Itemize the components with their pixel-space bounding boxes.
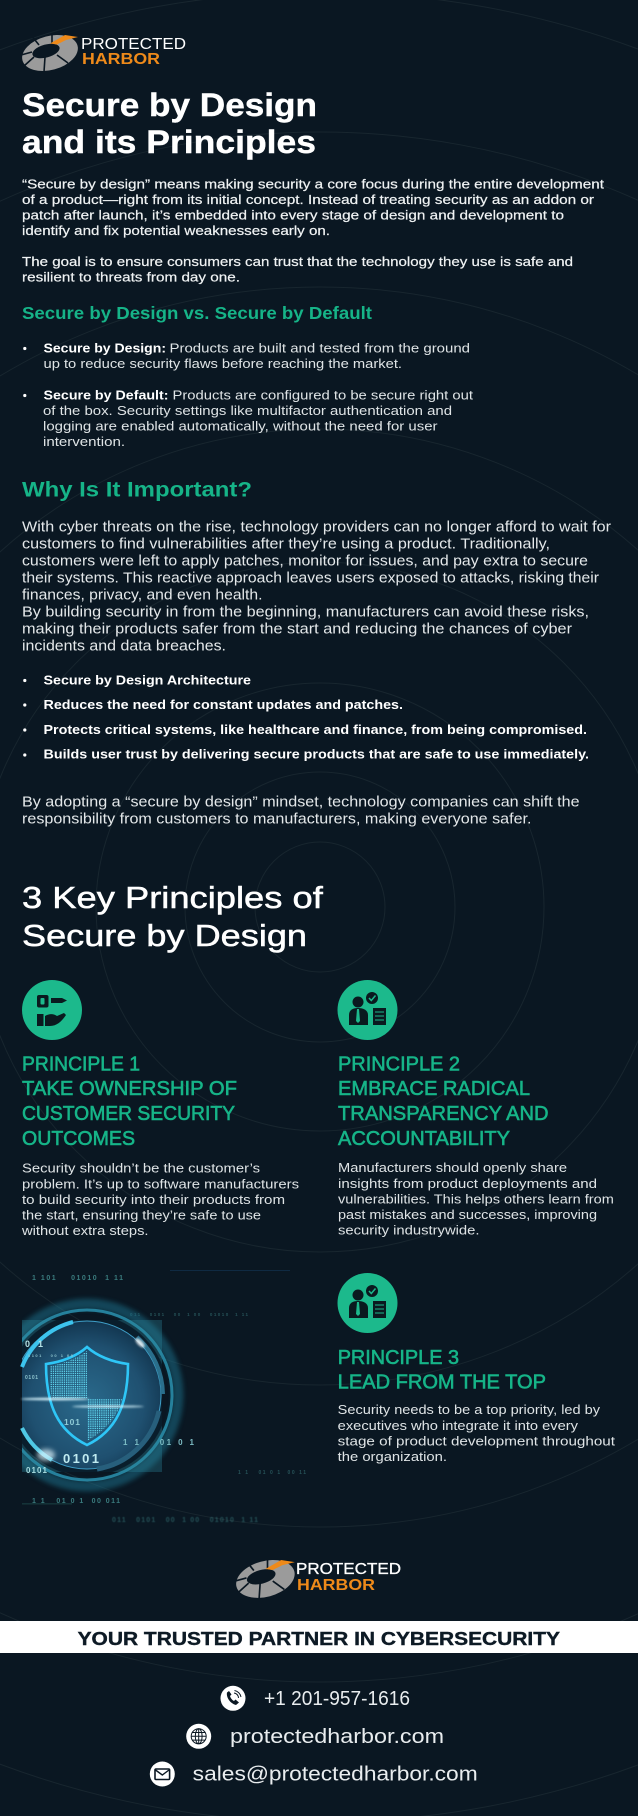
contact: phone: +1 201-957-1616 (264, 1688, 410, 1710)
heading: OUTCOMES (22, 1128, 135, 1150)
bullet: secure by default: Products are configured to be secure right out (172, 387, 473, 402)
bullet: secure by design: Products are built and tested from the ground (170, 340, 470, 355)
text block: intro: identify and fix potential weaknesses early on. (22, 223, 330, 238)
contact: email (150, 1762, 478, 1786)
logo: top: PROTECTED (81, 36, 186, 53)
text block: why important: With cyber threats on the rise, technology providers can no longer afford to wait for (22, 519, 611, 535)
text block: executives who integrate it into every (338, 1418, 578, 1433)
heading: LEAD FROM THE TOP (338, 1371, 546, 1393)
panel: principle 2 (338, 980, 614, 1238)
heading: PRINCIPLE 2 (338, 1054, 460, 1076)
text block (21, 1161, 299, 1238)
text block: intro: patch after launch, it’s embedded into every stage of design and development to (22, 208, 564, 222)
panel: principle 1 (21, 980, 299, 1238)
illustration: digital shield: 0 1 (25, 1339, 43, 1349)
text block: Security needs to be a top priority, led by (338, 1402, 600, 1417)
binary text (32, 1275, 306, 1524)
text block: stage of product development throughout (338, 1433, 615, 1448)
text block: the start, ensuring they’re safe to use (22, 1207, 261, 1222)
icon: logo mark (18, 29, 82, 77)
heading: secure by design vs default: Secure by Design vs. Secure by Default (22, 303, 372, 323)
contact: website (186, 1724, 444, 1749)
illustration: digital shield: 0101 (63, 1451, 99, 1466)
illustration: digital shield: 0101 00 1 00 (28, 1353, 74, 1358)
illustration: digital shield: 0101 (25, 1375, 38, 1381)
illustration: digital shield: 101 (64, 1417, 80, 1427)
logo: top: HARBOR (82, 51, 160, 68)
icon: phone (220, 1686, 246, 1711)
text block: closing (22, 795, 580, 828)
text block: insights from product deployments and (338, 1176, 597, 1191)
list: benefits: Builds user trust by delivering secure products that are safe to use immediately. (44, 747, 589, 762)
heading: TRANSPARENCY AND (338, 1103, 549, 1125)
text block: why important: their systems. This reactive approach leaves users exposed to attacks, risking their (22, 570, 599, 586)
text block: intro (22, 176, 604, 285)
binary text: 011 0101 00 1 00 01010 1 11 (112, 1517, 258, 1524)
binary text: 011 0101 00 1 00 01010 1 11 (130, 1312, 248, 1317)
bullet: secure by design: up to reduce security flaws before reaching the market. (44, 356, 402, 371)
title: and its Principles (22, 124, 316, 160)
title (22, 87, 317, 160)
bullet: secure by default: intervention. (43, 434, 125, 449)
bullet: secure by default: Secure by Default: (44, 387, 168, 402)
icon: shield (46, 1347, 128, 1445)
text block: Security shouldn’t be the customer’s (22, 1161, 260, 1176)
bullet: secure by default: logging are enabled automatically, without the need for user (43, 418, 438, 433)
text block: without extra steps. (21, 1223, 148, 1238)
contact: phone (220, 1686, 410, 1711)
text block (338, 1402, 615, 1464)
icon: person with clipboard (338, 1273, 398, 1333)
contact: website: protectedharbor.com (230, 1726, 444, 1748)
binary text: 1 101 01010 1 11 (32, 1275, 123, 1282)
logo: top (18, 29, 186, 77)
heading: CUSTOMER SECURITY (22, 1103, 235, 1125)
icon: person with clipboard (338, 980, 398, 1040)
icon: key in hand (22, 980, 82, 1040)
text block: intro: The goal is to ensure consumers can trust that the technology they use is safe and (22, 254, 573, 269)
text block: why important: making their products safer from the start and reducing the chances of cyber (22, 621, 572, 637)
text block: to build security into their products from (22, 1192, 285, 1207)
bullet: secure by design (23, 340, 470, 371)
illustration: digital shield: 0101 (26, 1466, 48, 1475)
heading: TAKE OWNERSHIP OF (22, 1078, 237, 1100)
text block: closing: By adopting a “secure by design” mindset, technology companies can shift the (22, 795, 580, 811)
logo: footer (232, 1554, 401, 1604)
text block (338, 1160, 614, 1238)
text block: why important: finances, privacy, and even health. (22, 587, 262, 603)
heading (338, 1347, 546, 1393)
text block: intro: resilient to threats from day one. (22, 270, 240, 285)
list: benefits: Secure by Design Architecture (44, 672, 251, 687)
contact: email: sales@protectedharbor.com (193, 1764, 478, 1786)
binary text: 1 1 01 0 1 00 11 (238, 1470, 306, 1476)
bullet: secure by default (23, 387, 473, 449)
text block: the organization. (338, 1449, 447, 1464)
heading (22, 1054, 237, 1150)
heading: ACCOUNTABILITY (338, 1128, 510, 1150)
text block: security industrywide. (338, 1222, 480, 1238)
heading (338, 1054, 549, 1150)
list: benefits: Reduces the need for constant updates and patches. (44, 697, 403, 712)
heading: 3 key principles (22, 880, 323, 953)
illustration: digital shield (0, 1270, 306, 1524)
logo: footer: HARBOR (297, 1577, 375, 1594)
heading: EMBRACE RADICAL (338, 1078, 530, 1100)
bullet: secure by design: Secure by Design: (44, 340, 166, 355)
heading: PRINCIPLE 3 (338, 1347, 459, 1369)
text block: why important: customers were left to apply patches, monitor for issues, and pay extra to secure (22, 553, 588, 569)
text block: intro: of a product—right from its initial concept. Instead of treating security as an addon or (22, 192, 595, 207)
bullet: secure by default: of the box. Security settings like multifactor authentication and (43, 403, 452, 418)
icon: envelope (150, 1762, 175, 1786)
list: design vs default (23, 340, 473, 449)
text block: problem. It’s up to software manufacturers (22, 1176, 299, 1191)
heading: 3 key principles: Secure by Design (22, 918, 307, 953)
heading: why is it important: Why Is It Important? (22, 478, 252, 502)
banner: tagline: YOUR TRUSTED PARTNER IN CYBERSECURITY (78, 1628, 561, 1649)
text block: vulnerabilities. This helps others learn from (338, 1192, 614, 1206)
illustration: digital shield: 1 1 01 0 1 (123, 1438, 195, 1447)
heading: PRINCIPLE 1 (22, 1054, 140, 1076)
text block: past mistakes and successes, improving (338, 1207, 597, 1222)
logo: footer: PROTECTED (296, 1561, 401, 1578)
text block: why important: By building security in from the beginning, manufacturers can avoid these risks, (22, 604, 589, 620)
banner: tagline (0, 1621, 638, 1653)
text block: why important: customers to find vulnerabilities after they’re using a product. Traditionally, (22, 536, 550, 552)
list: benefits: Protects critical systems, like healthcare and finance, from being compromised. (44, 722, 587, 737)
binary text: 1 1 01 0 1 00 011 (32, 1498, 120, 1505)
title: Secure by Design (22, 87, 317, 123)
heading: 3 key principles: 3 Key Principles of (22, 880, 323, 915)
text block: Manufacturers should openly share (338, 1160, 567, 1175)
text block: why important: incidents and data breaches. (22, 638, 226, 654)
icon: logo mark (232, 1554, 299, 1604)
text block: intro: “Secure by design” means making security a core focus during the entire development (22, 176, 604, 191)
text block: closing: responsibility from customers to manufacturers, making everyone safer. (22, 812, 532, 828)
panel: principle 3 (338, 1273, 615, 1464)
list: benefits (23, 672, 589, 762)
icon: globe (186, 1724, 211, 1749)
text block: why important (22, 519, 611, 654)
